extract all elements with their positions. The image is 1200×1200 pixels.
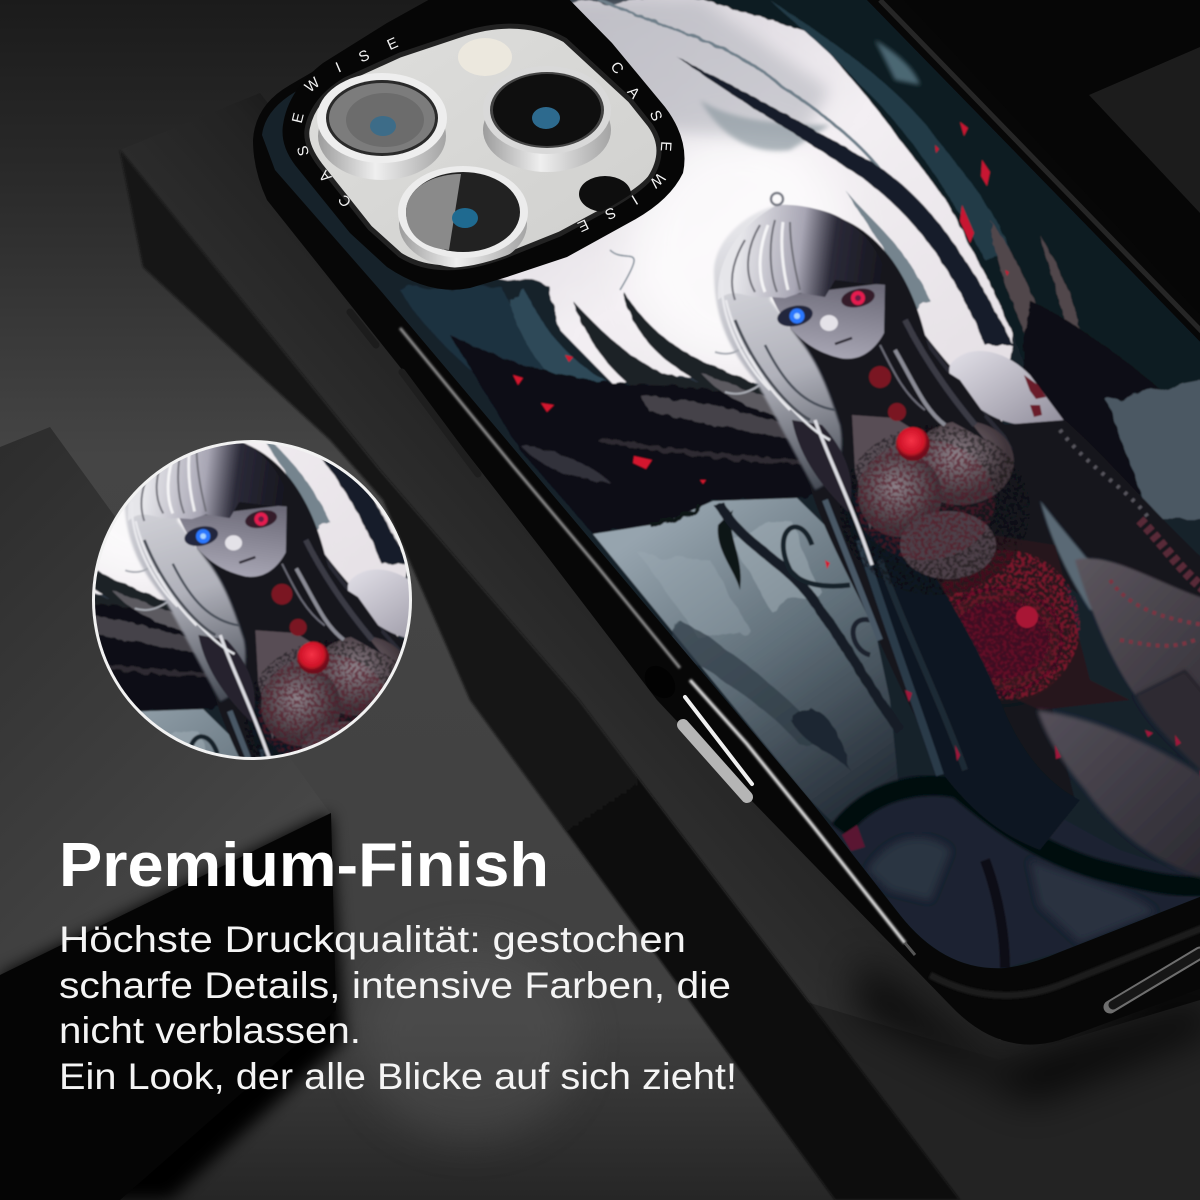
camera island <box>282 0 685 290</box>
description text block <box>59 919 737 1097</box>
branding text left: CASEWISE <box>292 37 398 206</box>
lens one <box>317 73 447 180</box>
slab front dark band <box>120 150 960 1200</box>
charging port <box>1110 953 1200 1007</box>
left step top <box>0 427 330 975</box>
zoom detail circle <box>92 440 412 760</box>
phone artwork <box>250 0 1200 990</box>
side port hole <box>638 660 682 704</box>
lens group <box>317 38 631 268</box>
case edge highlight <box>400 328 680 668</box>
lens two <box>483 66 611 172</box>
left step shadow <box>0 813 345 1200</box>
description text block: nicht verblassen. <box>59 1010 361 1051</box>
branding text right: CASEWISE <box>577 62 672 232</box>
camera glass <box>307 26 659 268</box>
description text block: scharfe Details, intensive Farben, die <box>59 965 731 1006</box>
magnified artwork <box>95 443 409 757</box>
slab bottom floor <box>800 1000 1200 1200</box>
right block top <box>1089 47 1200 213</box>
microphone sensor <box>579 176 631 212</box>
flash <box>458 38 512 76</box>
long side button <box>402 372 478 474</box>
silver side button <box>683 725 747 797</box>
phone case body <box>253 0 1200 1045</box>
title: Premium-Finish <box>59 831 549 900</box>
phone shadow <box>860 960 1200 1100</box>
left step front <box>0 813 336 1200</box>
floor glow <box>360 940 580 1140</box>
right top black <box>860 0 1200 350</box>
description text block: Höchste Druckqualität: gestochen <box>59 919 686 960</box>
upper side button <box>350 312 376 345</box>
description text block: Ein Look, der alle Blicke auf sich zieht! <box>59 1056 737 1097</box>
lens three <box>398 166 528 268</box>
